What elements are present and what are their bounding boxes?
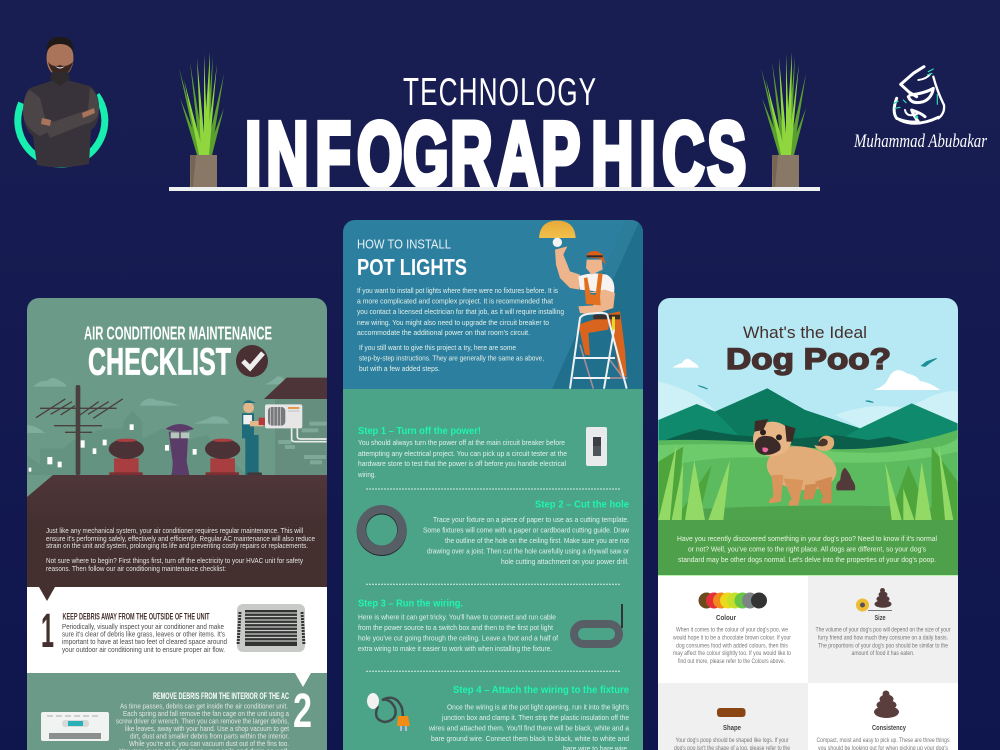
panel: dog poo xyxy=(658,298,958,750)
step 1 card: sure it's clear of debris like grass, leaves or other items. It's xyxy=(62,630,225,638)
step 2 card: Each spring and fall remove the fan cage on the unit using a xyxy=(123,709,290,718)
step 4: bare ground wire. Connect them black to black, white to white and xyxy=(431,734,629,743)
step 4: junction box and clamp it. Then strip the plastic insulation off the xyxy=(441,713,629,722)
icon: light switch xyxy=(586,427,607,466)
plant right xyxy=(761,52,806,187)
intro text: but with a few added steps. xyxy=(359,364,440,373)
step 2 card: screw driver or wrench. Then you can remove the larger debris, xyxy=(116,716,289,726)
heading xyxy=(358,240,466,275)
icon: ac grille xyxy=(237,604,305,652)
intro band xyxy=(658,520,958,575)
card: shape: Your dog's poop should be shaped like logs. If your xyxy=(676,738,788,744)
card: size: amount of food it has eaten. xyxy=(852,651,915,657)
icon: log xyxy=(717,708,746,717)
heading: HOW TO INSTALL xyxy=(357,238,451,252)
title: TECHNOLOGY xyxy=(403,70,596,113)
step 2 card: REMOVE DEBRIS FROM THE INTERIOR OF THE AC xyxy=(153,691,289,701)
step 4: Step 4 – Attach the wiring to the fixture xyxy=(453,684,629,696)
icon: poo xyxy=(874,690,899,718)
heading xyxy=(726,323,891,376)
step 4 xyxy=(366,671,630,750)
card: size: The proportions of your dog's poo should be similar to the xyxy=(818,644,949,650)
intro text: accommodate the additional power on that room's circuit. xyxy=(357,328,530,337)
icon: cable coil xyxy=(574,604,622,644)
intro text: a more complicated and complex project. It is recommended that xyxy=(357,296,554,306)
step 1: hardware store to test that the power is off before you handle electrical xyxy=(358,459,566,468)
intro text: you contact a licensed electrician for that job, as it will require installing xyxy=(357,307,564,316)
illustration: electrician on ladder xyxy=(539,221,627,389)
step 4: Once the wiring is at the pot light opening, run it into the light's xyxy=(447,702,629,712)
card: size: The volume of your dog's poo will depend on the size of your xyxy=(816,628,950,634)
plant left xyxy=(179,52,224,187)
illustration: pug landscape xyxy=(658,358,958,522)
card: colour: may affect the colour slightly too. If you would like to xyxy=(673,651,792,657)
step 1 card: 1 xyxy=(41,605,54,658)
step 3: from the power source to a switch box and then to the first pot light xyxy=(358,623,554,632)
step 2 card: While you're at it, you can vacuum dust out of the fins too. xyxy=(129,739,289,748)
intro text: reasons. Then follow our air conditioning maintenance checklist: xyxy=(46,564,226,573)
intro text: Just like any mechanical system, your air conditioner requires regular maintenance. This will xyxy=(46,526,303,535)
step 2 card: like leaves, away with your hand. Use a shop vacuum to get xyxy=(125,724,290,733)
step 2 xyxy=(357,489,630,566)
panel: air conditioner checklist xyxy=(27,298,327,750)
card: size: furry friend and how much they consume on a daily basis. xyxy=(818,636,948,642)
step 1 card xyxy=(27,587,327,673)
title: INFOGRAPHICS xyxy=(245,105,746,206)
intro text: strain on the unit and system, prolonging its life and preventing costly repairs or replacements. xyxy=(46,541,308,550)
panel heading: CHECKLIST xyxy=(88,342,231,384)
step 2 card: dirt, dust and smaller debris from parts within the interior. xyxy=(130,732,289,740)
step 2: hole cutting attachment on your power drill. xyxy=(501,557,629,566)
heading: POT LIGHTS xyxy=(357,254,467,280)
step 2: the outline of the hole on the ceiling first. Make sure you are not xyxy=(445,536,630,545)
intro band: Have you recently discovered something in your dog's poo? Need to know if it's normal xyxy=(677,534,937,543)
card: colour: Colour xyxy=(716,613,736,622)
intro text: Not sure where to begin? First things first, turn off the electricity to your HVAC unit for safety xyxy=(46,556,303,565)
step 3: Step 3 – Run the wiring. xyxy=(358,598,463,610)
step 2: Step 2 – Cut the hole xyxy=(535,498,629,510)
heading: Dog Poo? xyxy=(726,343,891,376)
portrait with ring xyxy=(18,37,105,167)
intro text: step-by-step instructions. They are generally the same as above, xyxy=(359,354,544,362)
step 1 xyxy=(357,425,607,479)
step 3 xyxy=(358,584,622,653)
card: colour: find out more, please refer to the Colours above. xyxy=(678,659,785,665)
icon: indoor ac unit xyxy=(41,712,109,741)
step 1: You should always turn the power off at the main circuit breaker before xyxy=(358,438,565,447)
intro text: new wiring. You might also need to upgrade the circuit breaker to xyxy=(357,318,549,327)
rooftop illustration xyxy=(27,376,327,476)
step 1: wiring. xyxy=(357,470,376,479)
step 3: extra wiring to make it easier to work with when installing the fixture. xyxy=(358,644,552,653)
panel heading: AIR CONDITIONER MAINTENANCE xyxy=(84,324,272,344)
roof xyxy=(27,475,327,525)
intro band: or not? Well, you've come to the right place. All dogs are different, so your dog's xyxy=(688,544,926,554)
step 2: Some fixtures will come with a paper or cardboard cutting guide. Draw xyxy=(423,526,630,534)
intro text: ensure it's performing safely, effectively and efficiently. Regular AC maintenance will also reduce xyxy=(46,534,315,543)
intro text xyxy=(357,286,564,373)
step 4: wires and attached them. You'll find there will be black, white and a xyxy=(428,724,630,732)
intro text xyxy=(46,526,315,573)
intro text: If you still want to give this project a try, here are some xyxy=(359,343,516,352)
heading: What's the Ideal xyxy=(743,323,867,342)
step 1 card: your outdoor air conditioning unit to ensure proper air flow. xyxy=(62,645,225,654)
step 3: hole you've cut going through the ceiling. Leave a foot and a half of xyxy=(358,634,559,642)
icon: bulb and plug xyxy=(367,693,410,731)
step 1 card: important to have at least two feet of cleared space around xyxy=(62,637,227,646)
signature logo xyxy=(853,67,988,152)
check badge xyxy=(236,345,268,377)
shelf line xyxy=(169,187,820,191)
step 1 card: KEEP DEBRIS AWAY FROM THE OUTSIDE OF THE UNIT xyxy=(62,612,210,622)
step 2 card: As time passes, debris can get inside the air conditioner unit. xyxy=(120,702,288,710)
card: shape: Shape xyxy=(723,723,741,732)
panel heading xyxy=(84,326,272,376)
step 2: Trace your fixture on a piece of paper to use as a cutting template. xyxy=(433,515,629,524)
card: consistency xyxy=(808,683,958,750)
icon: colour swatches xyxy=(698,592,767,608)
panel intro background xyxy=(27,525,327,587)
card: shape xyxy=(658,683,808,750)
card: colour xyxy=(658,576,808,683)
icon: tape and poo xyxy=(856,588,892,612)
card: size xyxy=(808,576,958,683)
card: colour: dog consumes food with added colours, then this xyxy=(676,644,788,650)
panel: pot lights xyxy=(343,220,645,750)
card: colour: would hope it to be a chocolate brown colour. If your xyxy=(672,636,791,642)
step 2: drawing over a joist. Then cut the hole carefully using a drywall saw or xyxy=(427,546,629,556)
intro band: standard may be other dogs normal. Let's delve into the properties of your dog's poop. xyxy=(678,555,936,564)
step 2 card: 2 xyxy=(293,685,312,738)
step 1 card: Periodically, visually inspect your air conditioner and make xyxy=(62,622,224,631)
card: consistency: Compact, moist and easy to pick up. These are three things xyxy=(816,738,950,744)
card: size: Size xyxy=(874,613,886,622)
step 1: Step 1 – Turn off the power! xyxy=(358,425,481,437)
card: colour: When it comes to the colour of your dog's poo, we xyxy=(676,628,789,634)
step 1: attempting any electrical project. You can pick up a circuit tester at the xyxy=(358,449,567,458)
step 2 card xyxy=(27,673,327,750)
icon: ceiling hole ring xyxy=(357,505,407,556)
card: consistency: Consistency xyxy=(872,723,907,732)
step 3: Here is where it can get tricky. You'll have to connect and run cable xyxy=(358,612,556,622)
intro text: If you want to install pot lights where there were no fixtures before. It is xyxy=(357,286,558,295)
